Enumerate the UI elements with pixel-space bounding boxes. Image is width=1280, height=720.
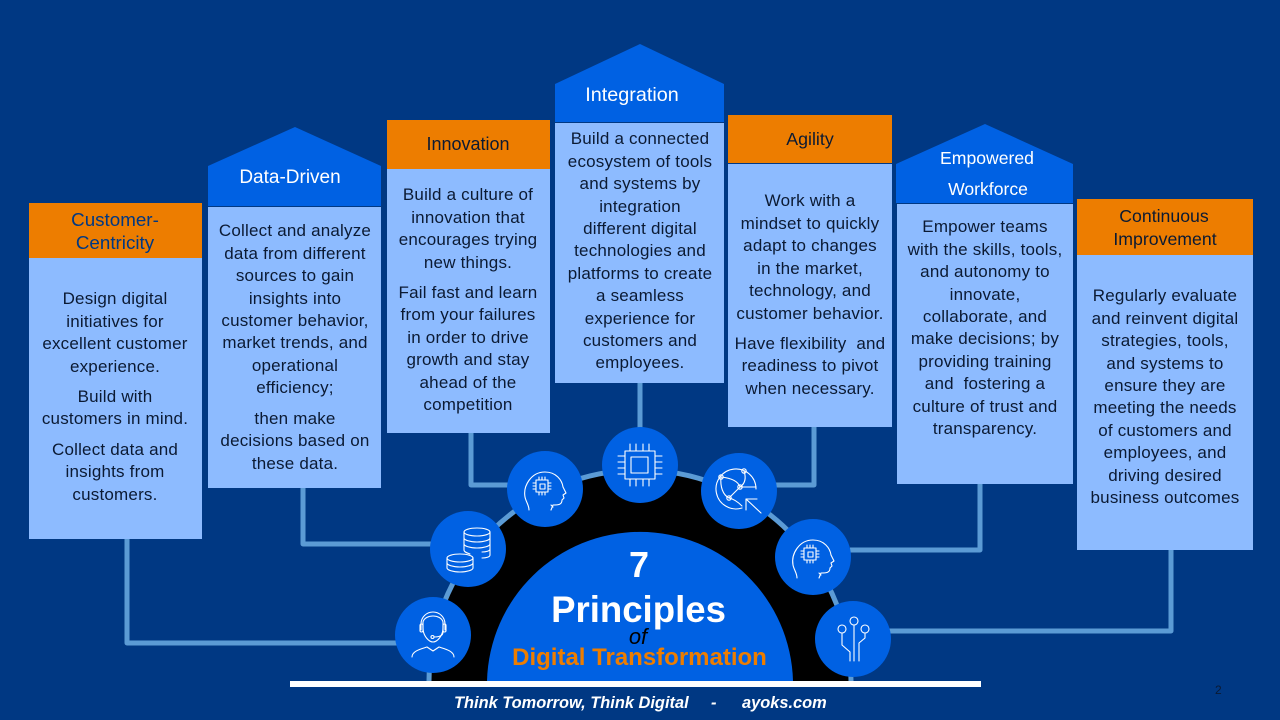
panel: Continuous Improvement <box>1077 199 1253 550</box>
black semicircle <box>429 470 851 681</box>
body text: new things. <box>424 253 512 272</box>
heading: Integration <box>585 84 679 106</box>
body text <box>399 185 537 414</box>
body text <box>42 289 188 504</box>
icon: customer support headset <box>395 597 471 673</box>
body text: integration <box>599 197 681 216</box>
panel: Agility <box>728 115 892 427</box>
body text: Work with a <box>765 191 856 210</box>
body text: data from different <box>224 244 366 263</box>
icon: circuit tree <box>815 601 891 677</box>
body text: these data. <box>252 454 338 473</box>
body text: Have flexibility and <box>735 334 885 353</box>
body text: Collect and analyze <box>219 221 371 240</box>
body text: sources to gain <box>236 266 354 285</box>
body text: customers. <box>72 485 158 504</box>
body text: Build with <box>78 387 152 406</box>
body text <box>219 221 371 473</box>
blue inner semicircle <box>487 532 793 681</box>
body text: employees, and <box>1104 443 1226 462</box>
body text <box>735 191 885 398</box>
body text: employees. <box>596 353 684 372</box>
panel: Innovation <box>387 120 550 433</box>
body text: from your failures <box>401 305 535 324</box>
body text: innovation that <box>411 208 525 227</box>
body text: mindset to quickly <box>741 214 880 233</box>
heading: Continuous <box>1119 206 1209 226</box>
body text: operational <box>252 356 338 375</box>
heading: Agility <box>786 129 834 149</box>
body text: growth and stay <box>406 350 530 369</box>
body text <box>568 129 712 372</box>
body text: experience for <box>585 309 695 328</box>
body text: business outcomes <box>1091 488 1239 507</box>
body text: insights into <box>249 289 341 308</box>
body text: strategies, tools, <box>1101 331 1229 350</box>
body text: ecosystem of tools <box>568 152 712 171</box>
body text: customer behavior. <box>736 304 884 323</box>
body text <box>1091 286 1239 507</box>
connector lines <box>127 383 1171 643</box>
heading: Centricity <box>76 232 155 253</box>
body text: Build a culture of <box>403 185 533 204</box>
body text: initiatives for <box>66 312 164 331</box>
body text: and autonomy to <box>920 262 1050 281</box>
icon: database stacks <box>430 511 506 587</box>
heading: Empowered <box>940 148 1034 168</box>
body text: technology, and <box>749 281 871 300</box>
body text: insights from <box>66 462 164 481</box>
body text: Build a connected <box>571 129 709 148</box>
body text: efficiency; <box>256 378 334 397</box>
body text: driving desired <box>1108 466 1222 485</box>
body text: customers and <box>583 331 697 350</box>
body text: and systems by <box>580 174 701 193</box>
body text: in order to drive <box>407 328 529 347</box>
heading: Data-Driven <box>239 167 341 188</box>
panel: Integration <box>555 44 724 383</box>
body text: collaborate, and <box>923 307 1047 326</box>
body text: technologies and <box>574 241 706 260</box>
heading: Workforce <box>948 179 1028 199</box>
hub title: of <box>629 624 650 649</box>
body text: customers in mind. <box>42 409 188 428</box>
white footer bar <box>290 681 981 687</box>
footer tagline <box>454 694 827 712</box>
heading: Improvement <box>1113 229 1217 249</box>
hub title: Principles <box>551 589 726 630</box>
body text: competition <box>423 395 513 414</box>
body text: Collect data and <box>52 440 178 459</box>
heading <box>1113 206 1217 249</box>
body text: customer behavior, <box>221 311 369 330</box>
body text: meeting the needs <box>1093 398 1237 417</box>
body text: platforms to create <box>568 264 712 283</box>
icon: head with chip <box>507 451 583 527</box>
body text: market trends, and <box>222 333 368 352</box>
body text: Empower teams <box>922 217 1048 236</box>
body text: and fostering a <box>925 374 1046 393</box>
hub ring <box>429 470 851 681</box>
body text: Design digital <box>63 289 167 308</box>
panel: Empowered Workforce <box>896 124 1073 484</box>
body text: and reinvent digital <box>1092 309 1238 328</box>
body text: transparency. <box>933 419 1037 438</box>
body text: culture of trust and <box>913 397 1057 416</box>
heading: Innovation <box>426 134 510 154</box>
icon: microchip <box>602 427 678 503</box>
footer tagline: - <box>711 694 716 712</box>
body text: a seamless <box>596 286 684 305</box>
body text: adapt to changes <box>743 236 877 255</box>
body text: when necessary. <box>744 379 875 398</box>
icon: global network with cursor <box>701 453 777 529</box>
body text: in the market, <box>757 259 863 278</box>
body text: decisions based on <box>220 431 370 450</box>
hub title: 7 <box>629 544 649 585</box>
body text: Fail fast and learn <box>399 283 537 302</box>
body text: innovate, <box>950 285 1020 304</box>
body text: of customers and <box>1098 421 1232 440</box>
panel: Customer-Centricity <box>29 203 202 539</box>
page number: 2 <box>1215 683 1222 697</box>
body text: experience. <box>70 357 160 376</box>
body text: providing training <box>918 352 1052 371</box>
body text: with the skills, tools, <box>907 240 1062 259</box>
central hub <box>429 470 851 681</box>
body text <box>907 217 1062 438</box>
panel: Data-Driven <box>208 127 381 488</box>
body text: then make <box>254 409 336 428</box>
body text: ahead of the <box>420 373 516 392</box>
body text: and systems to <box>1106 354 1224 373</box>
heading: Customer- <box>71 209 159 230</box>
icon: head with chip <box>775 519 851 595</box>
heading <box>71 209 159 253</box>
hub title: Digital Transformation <box>512 644 767 671</box>
hub title <box>512 544 767 671</box>
body text: different digital <box>583 219 697 238</box>
body text: readiness to pivot <box>742 356 878 375</box>
body text: excellent customer <box>42 334 188 353</box>
body text: Regularly evaluate <box>1093 286 1237 305</box>
footer tagline: Think Tomorrow, Think Digital <box>454 694 689 712</box>
body text: make decisions; by <box>911 329 1059 348</box>
body text: ensure they are <box>1104 376 1226 395</box>
heading <box>940 148 1034 199</box>
body text: encourages trying <box>399 230 537 249</box>
footer tagline: ayoks.com <box>742 694 827 712</box>
